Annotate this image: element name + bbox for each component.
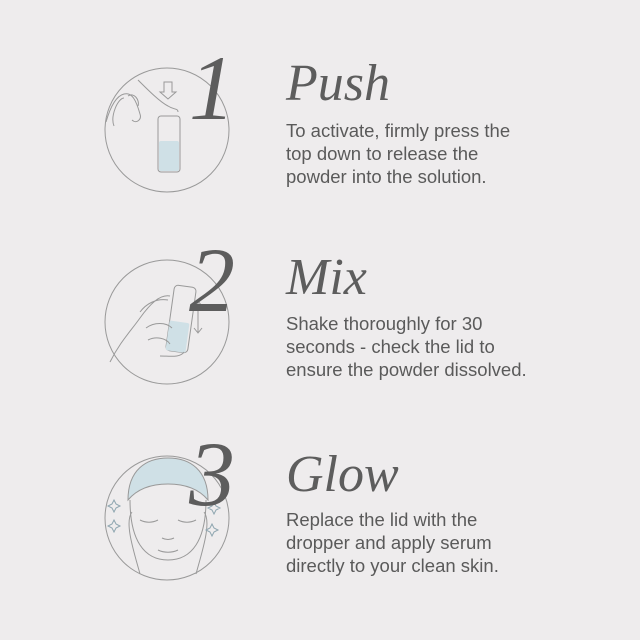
text 3	[286, 509, 499, 576]
text 1	[286, 120, 510, 187]
step 1 icon	[104, 68, 230, 192]
text 2: Shake thoroughly for 30	[286, 313, 482, 334]
text 1: To activate, firmly press the	[286, 120, 510, 141]
text 3: Replace the lid with the	[286, 509, 477, 530]
text 2: ensure the powder dissolved.	[286, 359, 527, 380]
text 2: seconds - check the lid to	[286, 336, 495, 357]
text 2	[286, 313, 527, 380]
number 1: 1	[189, 37, 235, 139]
step 2 icon	[104, 260, 230, 384]
step 3 icon	[104, 456, 230, 580]
text 3: directly to your clean skin.	[286, 555, 499, 576]
title Push: Push	[286, 55, 390, 112]
text 1: powder into the solution.	[286, 166, 487, 187]
title Glow: Glow	[286, 446, 399, 503]
title Mix: Mix	[286, 249, 367, 306]
text 1: top down to release the	[286, 143, 478, 164]
number 2: 2	[189, 229, 235, 331]
number 3: 3	[189, 423, 235, 525]
text 3: dropper and apply serum	[286, 532, 492, 553]
